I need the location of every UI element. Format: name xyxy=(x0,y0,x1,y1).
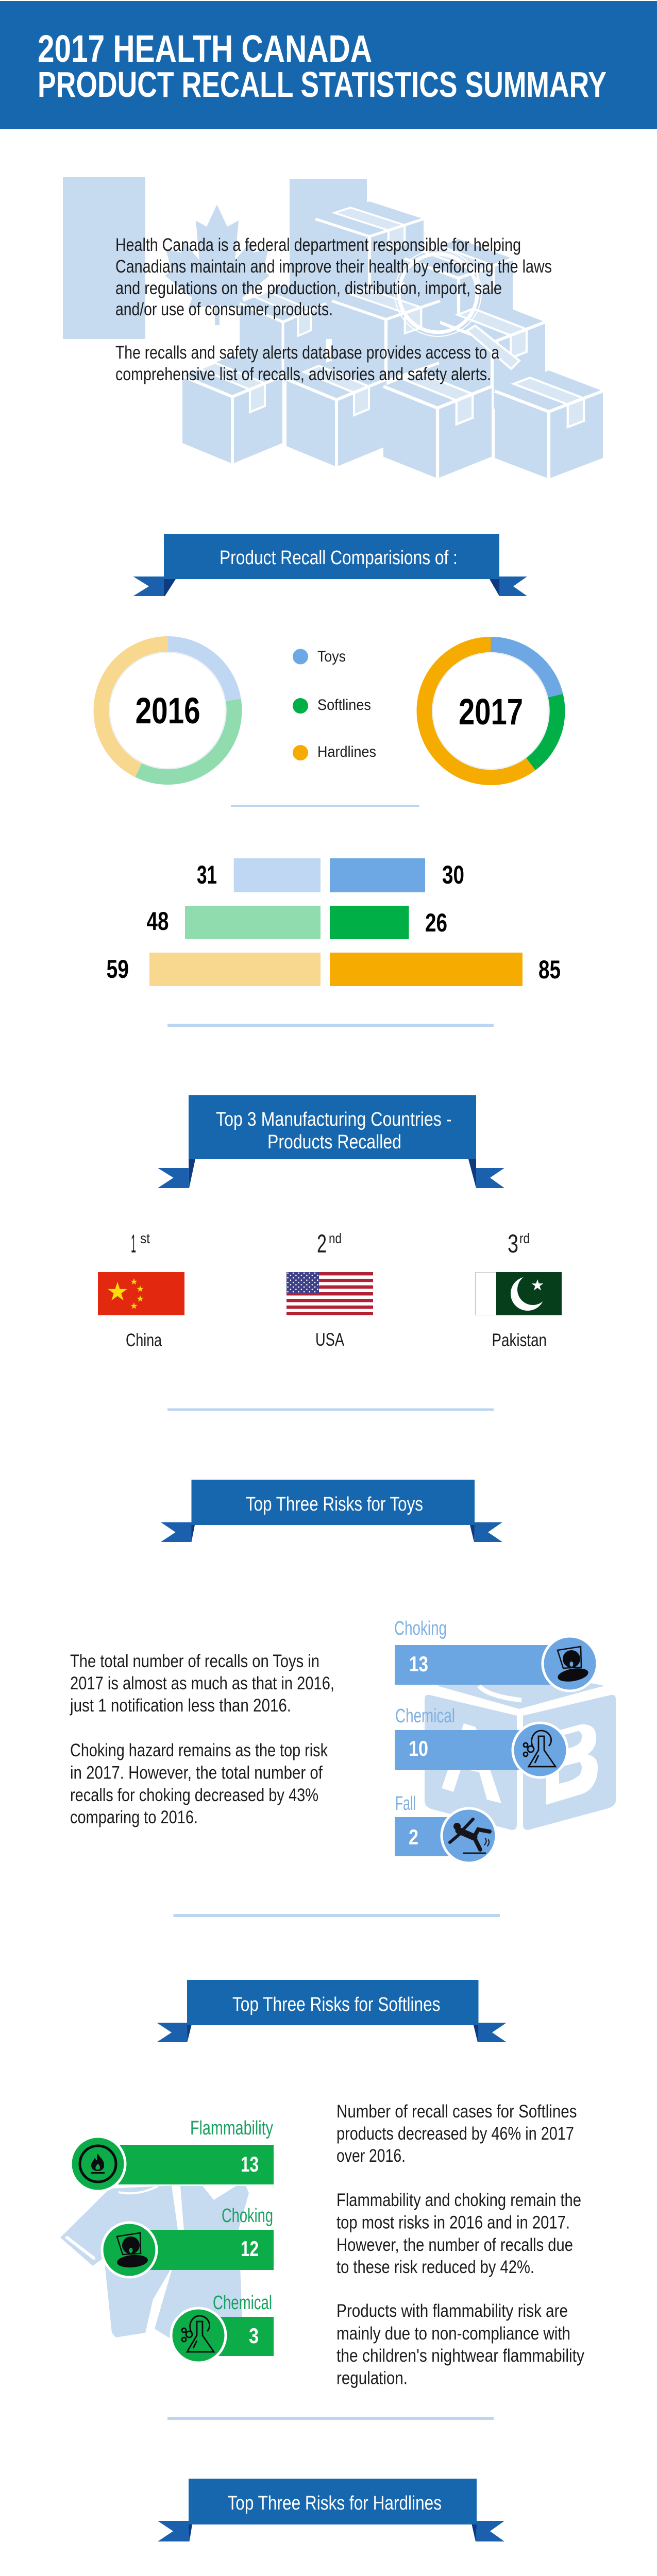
softlines text: top most risks in 2016 and in 2017. xyxy=(336,2212,570,2233)
softlines text xyxy=(336,2102,584,2388)
icon: choking xyxy=(543,1636,597,1691)
country: China: st xyxy=(140,1230,150,1246)
intro text: Canadians maintain and improve their health by enforcing the laws xyxy=(115,257,552,277)
softlines text: Products with flammability risk are xyxy=(336,2301,568,2321)
toys text: 2017 is almost as much as that in 2016, xyxy=(70,1673,334,1693)
background illustration: Canadian flag xyxy=(63,177,367,339)
softlines text: to these risk reduced by 42%. xyxy=(336,2257,534,2277)
row: toys xyxy=(197,858,464,892)
banner: top three risks for hardlines xyxy=(158,2479,504,2541)
toys risk: fall: Fall xyxy=(395,1793,416,1815)
title: 2017 HEALTH CANADA xyxy=(38,27,372,70)
toys risk: choking: Choking xyxy=(394,1618,447,1639)
toys text: just 1 notification less than 2016. xyxy=(70,1696,291,1716)
intro text xyxy=(115,235,552,384)
icon: fall xyxy=(442,1808,496,1863)
country: USA: 2 xyxy=(317,1229,327,1258)
intro text: and regulations on the production, distribution, import, sale xyxy=(115,278,502,298)
country: USA: nd xyxy=(329,1230,342,1246)
header band xyxy=(0,1,657,129)
icon: flammability xyxy=(71,2137,125,2191)
background illustration: toy block xyxy=(425,1669,616,1830)
row: toys: 31 xyxy=(197,860,217,889)
row: softlines xyxy=(146,906,447,939)
softlines text: the children's nightwear flammability xyxy=(336,2346,584,2366)
legend xyxy=(293,648,376,760)
toys text: The total number of recalls on Toys in xyxy=(70,1651,319,1671)
toys risk: chemical: 10 xyxy=(409,1736,428,1760)
softlines text: products decreased by 46% in 2017 xyxy=(336,2124,574,2144)
toys risk: chemical xyxy=(395,1705,567,1777)
intro text: Health Canada is a federal department responsible for helping xyxy=(115,235,521,255)
donut chart 2016 xyxy=(101,644,234,777)
softlines text: Number of recall cases for Softlines xyxy=(336,2102,577,2122)
softlines text: regulation. xyxy=(336,2368,408,2388)
softlines risk: choking: 12 xyxy=(241,2236,259,2261)
softlines risk: flammability: 13 xyxy=(241,2152,259,2176)
background illustration: t-shirt xyxy=(60,2185,249,2353)
softlines text: Flammability and choking remain the xyxy=(336,2190,581,2210)
country: China xyxy=(98,1229,184,1350)
row: softlines: 48 xyxy=(146,907,169,936)
banner: top 3 manufacturing countries xyxy=(158,1095,504,1188)
toys text xyxy=(70,1651,334,1827)
banner: product recall comparisons: Product Recall Comparisions of : xyxy=(220,547,458,569)
legend: Hardlines xyxy=(317,743,376,760)
softlines risk: choking xyxy=(102,2205,274,2277)
intro text: The recalls and safety alerts database provides access to a xyxy=(115,343,499,363)
country: Pakistan xyxy=(475,1229,562,1350)
intro text: comprehensive list of recalls, advisories and safety alerts. xyxy=(115,364,491,384)
banner: top three risks for toys: Top Three Risks for Toys xyxy=(246,1494,423,1515)
icon: chemical xyxy=(513,1723,567,1777)
toys text: comparing to 2016. xyxy=(70,1807,198,1827)
flag: USA xyxy=(287,1272,373,1315)
intro text: and/or use of consumer products. xyxy=(115,299,333,319)
toys text: in 2017. However, the total number of xyxy=(70,1763,323,1783)
country: China: 1 xyxy=(131,1229,136,1258)
banner: top 3 manufacturing countries: Top 3 Manufacturing Countries - xyxy=(216,1109,451,1130)
banner: top three risks for softlines: Top Three Risks for Softlines xyxy=(232,1994,440,2015)
country: Pakistan: 3 xyxy=(508,1229,518,1258)
legend: Softlines xyxy=(317,697,371,714)
row: hardlines xyxy=(106,953,561,986)
butterfly bar chart xyxy=(106,858,561,986)
country: USA xyxy=(287,1229,373,1350)
toys risk: fall xyxy=(395,1793,496,1863)
row: toys: 30 xyxy=(442,860,464,889)
toys text: recalls for choking decreased by 43% xyxy=(70,1785,318,1805)
toys text: Choking hazard remains as the top risk xyxy=(70,1740,328,1760)
country: USA: USA xyxy=(315,1330,345,1350)
donut chart 2017 xyxy=(425,645,558,777)
toys risk: choking xyxy=(394,1618,597,1691)
toys risk: choking: 13 xyxy=(409,1652,428,1676)
icon: chemical xyxy=(171,2308,226,2363)
donut chart 2017: 2017 xyxy=(459,692,523,733)
row: hardlines: 59 xyxy=(106,955,129,984)
softlines text: mainly due to non-compliance with xyxy=(336,2324,570,2344)
donut chart 2016: 2016 xyxy=(136,691,200,732)
toys risk: chemical: Chemical xyxy=(395,1705,455,1727)
softlines risk: chemical xyxy=(171,2292,274,2363)
softlines text: However, the number of recalls due xyxy=(336,2235,573,2255)
title xyxy=(38,27,607,105)
softlines risk: chemical: Chemical xyxy=(213,2292,272,2314)
flag: China xyxy=(98,1272,184,1315)
softlines risk: choking: Choking xyxy=(222,2205,273,2227)
banner: top three risks for toys xyxy=(161,1480,502,1542)
toys risk: fall: 2 xyxy=(409,1825,418,1849)
banner: product recall comparisons xyxy=(133,534,527,596)
softlines risk: chemical: 3 xyxy=(249,2324,259,2348)
softlines risk: flammability xyxy=(71,2117,274,2191)
background illustration: stacked boxes and magnifier xyxy=(182,201,603,479)
country: Pakistan: Pakistan xyxy=(492,1330,547,1350)
banner: top three risks for hardlines: Top Three Risks for Hardlines xyxy=(228,2493,442,2514)
row: hardlines: 85 xyxy=(538,955,561,984)
softlines text: over 2016. xyxy=(336,2146,406,2166)
icon: choking xyxy=(102,2223,157,2277)
country: Pakistan: rd xyxy=(519,1230,530,1246)
banner: top 3 manufacturing countries: Products Recalled xyxy=(267,1131,401,1153)
legend: Toys xyxy=(317,648,346,665)
banner: top three risks for softlines xyxy=(157,1980,507,2042)
row: softlines: 26 xyxy=(425,908,447,937)
softlines risk: flammability: Flammability xyxy=(190,2117,273,2139)
country: China: China xyxy=(126,1330,162,1350)
flag: Pakistan xyxy=(475,1272,562,1315)
